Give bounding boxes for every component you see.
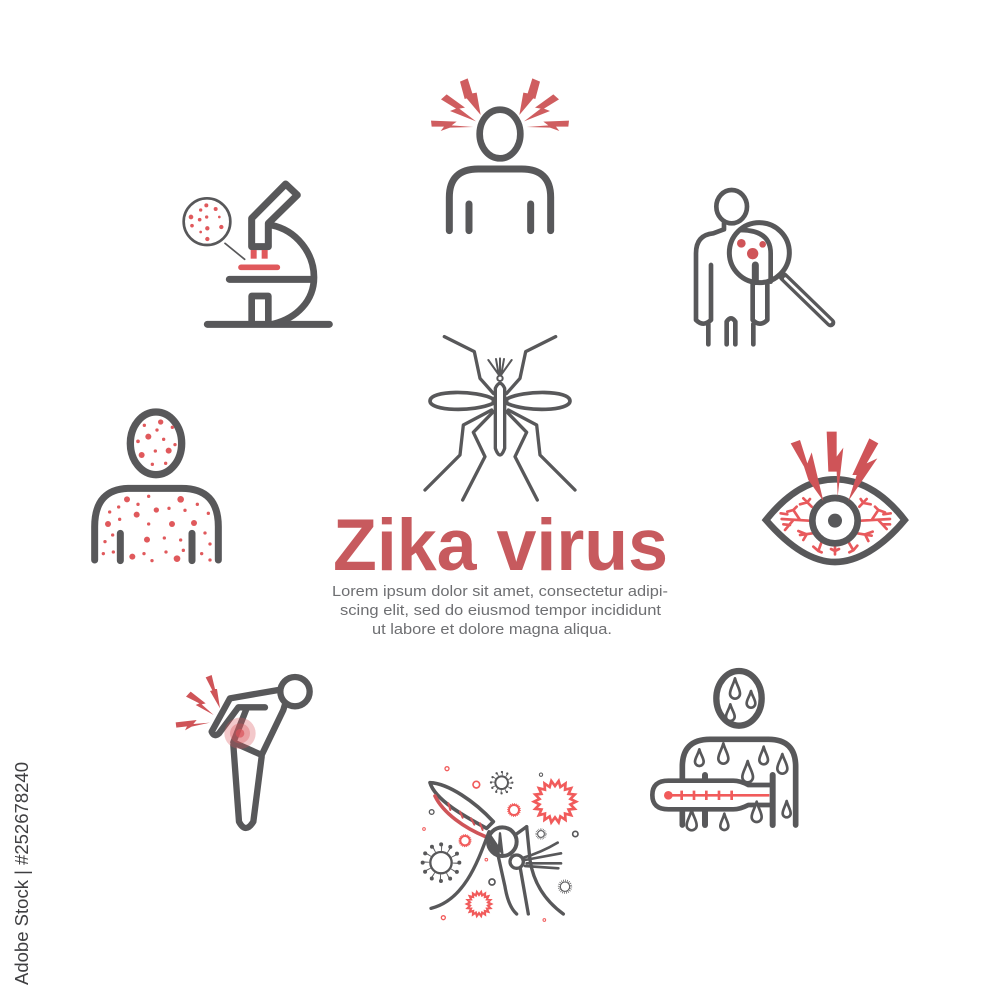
icon: red eye (766, 432, 905, 562)
icon: mosquito (425, 337, 575, 500)
icon: person with back pain (176, 675, 310, 828)
title: Zika virus (333, 505, 668, 586)
text block: description: scing elit, sed do eiusmod tempor incididunt (340, 602, 662, 619)
text block: description: Lorem ipsum dolor sit amet, consectetur adipi- (332, 583, 668, 600)
icon: person with rash (95, 412, 218, 562)
icon: mosquito with viruses (423, 767, 578, 921)
text block: description: ut labore et dolore magna aliqua. (372, 621, 612, 638)
icon: microscope (184, 184, 329, 324)
stock id caption: Adobe Stock | #252678240 (12, 762, 32, 985)
icon: headache (431, 78, 569, 231)
text block: description (332, 583, 668, 638)
icon: fever person with thermometer (652, 671, 796, 830)
icon: person under magnifying glass (696, 190, 831, 344)
